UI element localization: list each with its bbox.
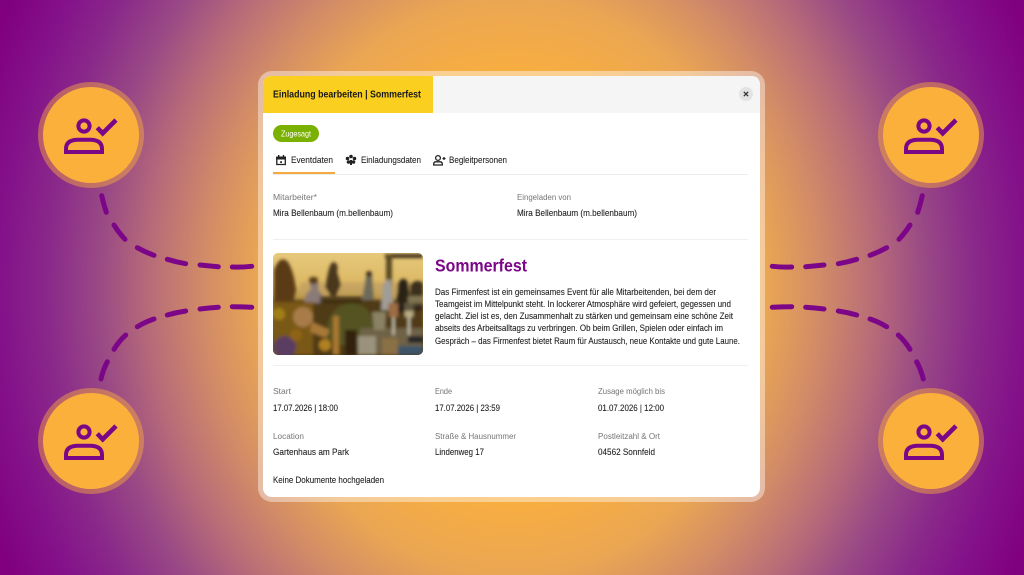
field: Mitarbeiter: Mira Bellenbaum (m.bellenbaum) (273, 208, 393, 218)
event description: gelacht. Ziel ist es, den Zusammenhalt zu stärken und gemeinsam eine schöne Zeit (435, 311, 734, 321)
heading tab: yellow title (263, 76, 433, 113)
field: Location: Gartenhaus am Park (273, 447, 350, 457)
field: Ende (435, 386, 500, 413)
event description: Gespräch – das Firmenfest bietet Raum für Austausch, neue Kontakte und gute Laune. (435, 336, 740, 346)
event description (435, 287, 740, 346)
field: Mitarbeiter: Mitarbeiter* (273, 192, 318, 202)
status badge: Zugesagt (281, 130, 312, 138)
icon: person bottom right (878, 388, 984, 494)
field: Mitarbeiter (273, 192, 393, 218)
infographic canvas (38, 71, 984, 502)
field: Eingeladen von (517, 192, 637, 218)
icon: close button (739, 87, 753, 101)
dialog header bar (263, 76, 760, 113)
icon: person bottom left (38, 388, 144, 494)
event description: Das Firmenfest ist ein gemeinsames Event für alle Mitarbeitenden, bei dem der (435, 287, 716, 297)
event photo (273, 253, 423, 358)
active tab underline (273, 172, 335, 174)
field: Postleitzahl und Ort: 04562 Sonnfeld (598, 447, 655, 457)
field: Zusage möglich bis: Zusage möglich bis (598, 386, 665, 396)
icon: person top right (878, 82, 984, 188)
tab: Begleitpersonen: Begleitpersonen (449, 155, 507, 165)
field: Zusage möglich bis: 01.07.2026 | 12:00 (598, 403, 664, 413)
field: Straße und Hausnummer (435, 431, 516, 457)
status badge (273, 125, 319, 142)
field: Postleitzahl und Ort (598, 431, 661, 457)
heading tab: yellow title: Einladung bearbeiten | Sommerfest (273, 90, 422, 100)
tab: Eventdaten: Eventdaten (291, 155, 333, 165)
arrow: dashed connector bottom left (101, 307, 252, 379)
field: Location: Location (273, 431, 304, 441)
field: Straße und Hausnummer: Straße & Hausnummer (435, 431, 516, 441)
field: Ende: Ende (435, 386, 452, 396)
field: Start (273, 386, 338, 413)
event description: abseits des Arbeitsalltags zu verbringen. Ob beim Grillen, Spielen oder einfach im (435, 323, 723, 333)
arrow: dashed connector top right (772, 196, 922, 267)
field: Eingeladen von: Mira Bellenbaum (m.bellenbaum) (517, 208, 637, 218)
field: Postleitzahl und Ort: Postleitzahl & Ort (598, 431, 661, 441)
icon: person top left (38, 82, 144, 188)
field: Zusage möglich bis (598, 386, 665, 413)
event description: Teamgeist im Mittelpunkt steht. In lockerer Atmosphäre wird gefeiert, gegessen und (435, 299, 731, 309)
arrow: dashed connector bottom right (772, 307, 923, 379)
tab: Einladungsdaten: Einladungsdaten (361, 155, 421, 165)
field: Start: Start (273, 386, 292, 396)
field: Location (273, 431, 350, 457)
documents note: Keine Dokumente hochgeladen (273, 475, 384, 485)
field: Eingeladen von: Eingeladen von (517, 192, 571, 202)
panel: invitation dialog (258, 71, 765, 502)
field: Straße und Hausnummer: Lindenweg 17 (435, 447, 484, 457)
arrow: dashed connector top left (102, 196, 252, 267)
event title: Sommerfest (435, 256, 527, 276)
field: Ende: 17.07.2026 | 23:59 (435, 403, 500, 413)
field: Start: 17.07.2026 | 18:00 (273, 403, 338, 413)
